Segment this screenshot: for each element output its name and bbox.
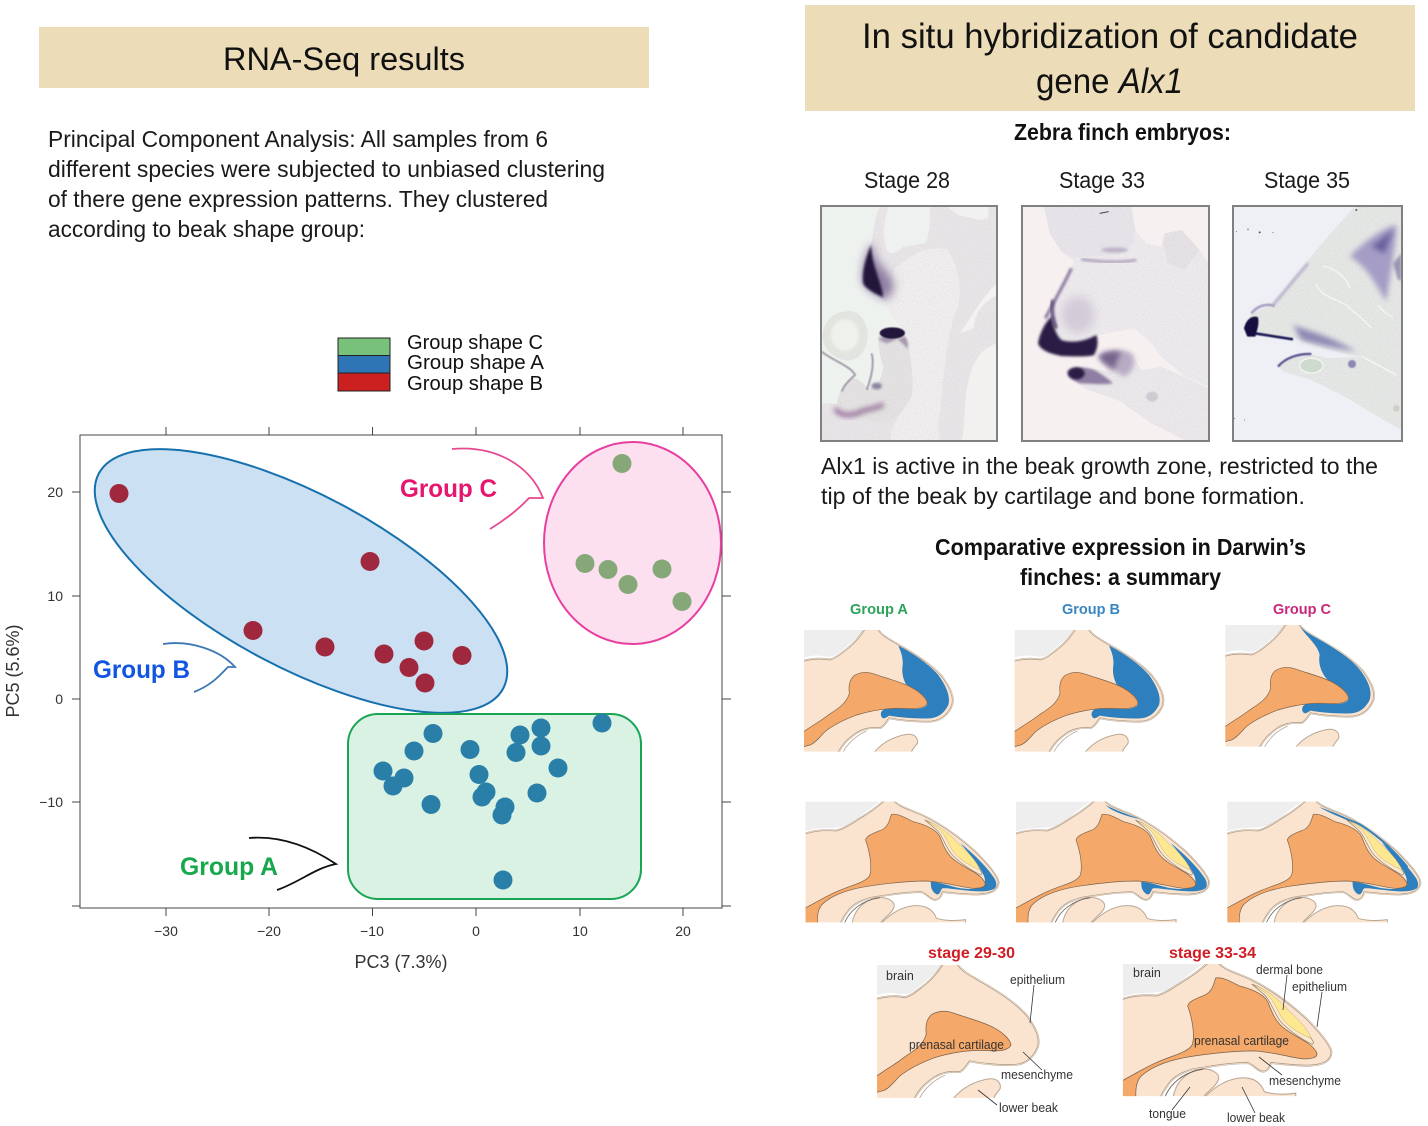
diagram: stage 29-30 annotated: stage 29-30	[928, 945, 1015, 962]
legend: group shapes: Group shape B	[407, 373, 543, 395]
heading: comparative expression summary	[935, 534, 1306, 590]
diagram: stage 29-30 annotated: epithelium	[1010, 973, 1065, 987]
cluster: group C ellipse	[544, 442, 721, 644]
cluster: group A rounded box	[348, 714, 641, 899]
legend: group shapes: Group shape C	[407, 332, 543, 354]
axis tick labels: 20	[47, 484, 63, 500]
diagram: stage 29-30 annotated	[873, 945, 1073, 1115]
diagram: stage 29-30 annotated: brain	[886, 969, 914, 983]
legend: group shapes	[338, 332, 545, 395]
heading: comparative expression summary: finches: a summary	[1020, 564, 1221, 590]
diagram: stage 29-30 annotated: prenasal cartilage	[909, 1038, 1004, 1052]
callout: Group C	[400, 448, 543, 529]
axis tick labels: −20	[257, 923, 281, 939]
diagram: stage 29-30 annotated: lower beak	[999, 1101, 1059, 1115]
panel: in situ hybridization title banner: In situ hybridization of candidate	[862, 17, 1358, 56]
text block: PCA description: of there gene expression patterns. They clustered	[48, 186, 548, 212]
image: stage 28 embryo section	[821, 206, 997, 441]
legend: group shapes: Group shape A	[407, 352, 545, 374]
image: stage 35 embryo section	[1233, 206, 1402, 441]
callout: Group C: Group C	[400, 475, 497, 503]
diagram: stage 33-34 annotated: brain	[1133, 966, 1161, 980]
panel: in situ hybridization title banner: gene Alx1	[1036, 62, 1183, 101]
chart: PCA scatter plot	[3, 397, 731, 972]
callout: Group A: Group A	[180, 853, 278, 881]
text block: Alx1 description	[821, 453, 1378, 509]
image: stage 33 embryo section	[1022, 206, 1209, 441]
axis tick labels: 0	[55, 691, 63, 707]
text block: PCA description: Principal Component Analysis: All samples from 6	[48, 126, 548, 152]
panel: in situ hybridization title banner	[805, 5, 1415, 111]
diagram: Group A early beak	[800, 627, 952, 757]
diagram: stage 33-34 annotated: epithelium	[1292, 980, 1347, 994]
diagram: Group A late beak	[798, 798, 998, 927]
label: finch Group A: Group A	[850, 601, 908, 618]
text block: PCA description: different species were subjected to unbiased clustering	[48, 156, 605, 182]
diagram: stage 33-34 annotated: prenasal cartilage	[1194, 1034, 1289, 1048]
label: stage 28: Stage 28	[864, 167, 950, 193]
points: group B	[110, 484, 472, 692]
label: stage 33: Stage 33	[1059, 167, 1145, 193]
callout: Group B: Group B	[93, 656, 190, 684]
text block: PCA description: according to beak shape group:	[48, 216, 365, 242]
heading: comparative expression summary: Comparative expression in Darwin’s	[935, 534, 1306, 560]
points: group C	[576, 454, 692, 611]
label: finch Group B: Group B	[1062, 601, 1120, 618]
diagram: Group B early beak	[1011, 627, 1163, 757]
text block: Alx1 description: tip of the beak by cartilage and bone formation.	[821, 483, 1305, 509]
panel: RNA-Seq title banner	[39, 27, 649, 88]
y axis label: PC5 (5.6%)	[3, 624, 23, 718]
diagram: stage 33-34 annotated: tongue	[1149, 1107, 1186, 1121]
label: finch Group C: Group C	[1273, 601, 1331, 618]
diagram: stage 33-34 annotated: lower beak	[1227, 1111, 1286, 1125]
axis tick labels: −30	[154, 923, 178, 939]
axis tick labels: −10	[39, 794, 63, 810]
text block: Alx1 description: Alx1 is active in the beak growth zone, restricted to the	[821, 453, 1378, 479]
diagram: Group C late beak	[1220, 798, 1420, 927]
axis tick labels: 20	[675, 923, 691, 939]
diagram: stage 29-30 annotated: mesenchyme	[1001, 1068, 1073, 1082]
label: stage 35: Stage 35	[1264, 167, 1350, 193]
heading: zebra finch embryos: Zebra finch embryos:	[1014, 119, 1231, 145]
diagram: Group B late beak	[1009, 798, 1209, 927]
axis tick labels: 10	[47, 588, 63, 604]
axis tick labels: 10	[572, 923, 588, 939]
diagram: stage 33-34 annotated: mesenchyme	[1269, 1074, 1341, 1088]
diagram: stage 33-34 annotated: stage 33-34	[1169, 945, 1256, 962]
x axis label: PC3 (7.3%)	[354, 952, 448, 972]
axis tick labels	[39, 484, 691, 939]
diagram: stage 33-34 annotated: dermal bone	[1256, 963, 1323, 977]
diagram: Group C early beak	[1221, 622, 1374, 752]
axis tick labels: −10	[360, 923, 384, 939]
heading: RNA-Seq results: RNA-Seq results	[223, 41, 465, 77]
diagram: stage 33-34 annotated	[1115, 945, 1347, 1125]
text block: PCA description	[48, 126, 605, 242]
axis tick labels: 0	[472, 923, 480, 939]
callout: Group B	[93, 643, 235, 692]
points: group A	[374, 714, 612, 890]
cluster: group B ellipse	[58, 397, 544, 765]
callout: Group A	[180, 838, 336, 890]
plot frame and axes	[72, 427, 731, 916]
